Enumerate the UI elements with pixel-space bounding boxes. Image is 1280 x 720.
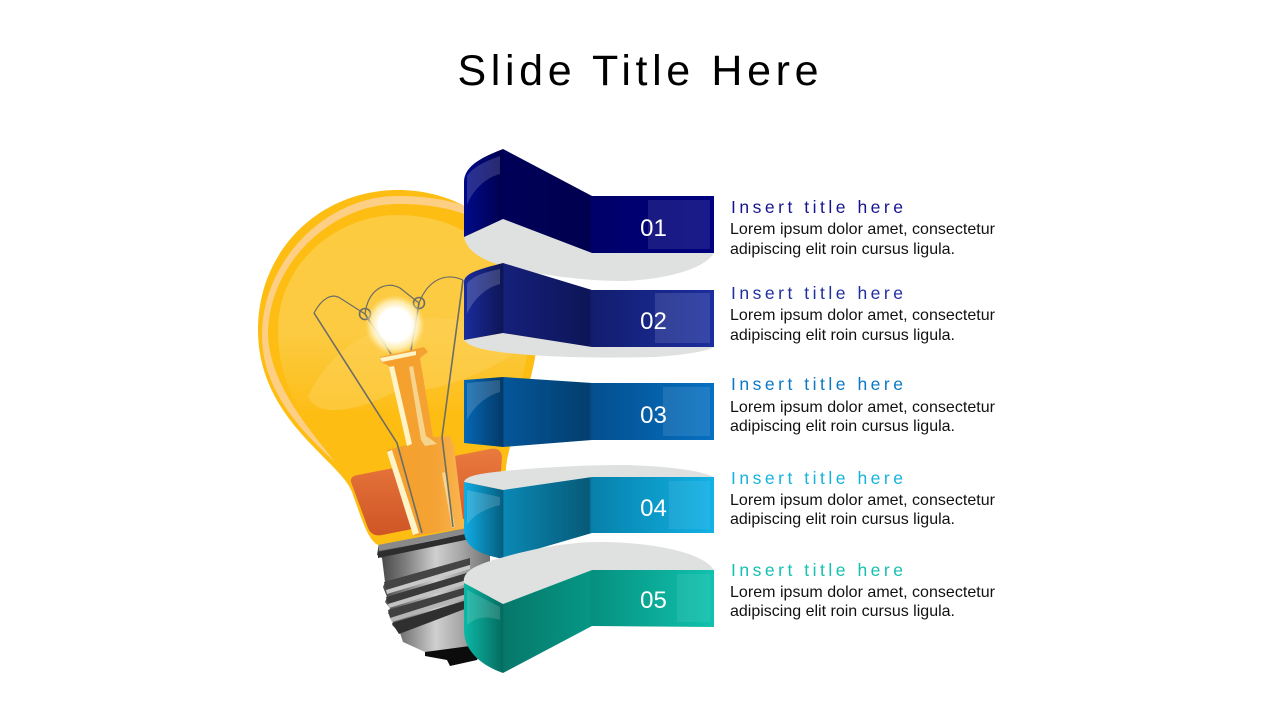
body 4: adipiscing elit roin cursus ligula. xyxy=(730,511,955,528)
heading 3: Insert title here xyxy=(731,374,903,394)
bulb screw base xyxy=(377,526,490,666)
glass swoosh xyxy=(308,318,514,410)
text block 5 xyxy=(730,560,996,620)
number 02: 02 xyxy=(640,308,667,335)
ribbon 3 xyxy=(464,377,714,447)
ribbon 5 band xyxy=(464,570,714,673)
body 2: Lorem ipsum dolor amet, consectetur xyxy=(730,307,996,324)
ribbon 5 number panel xyxy=(677,574,710,622)
heading 2: Insert title here xyxy=(731,283,903,303)
number 01: 01 xyxy=(640,215,667,242)
title: Slide Title Here xyxy=(458,47,818,95)
filament glow xyxy=(365,295,425,355)
ribbon 4 shelf xyxy=(464,465,714,490)
heading 1: Insert title here xyxy=(731,197,903,217)
ribbon 1 band xyxy=(464,149,714,253)
heading 5: Insert title here xyxy=(731,560,903,580)
icon: light bulb xyxy=(258,190,538,666)
glass rim highlight xyxy=(262,196,492,462)
body 2: adipiscing elit roin cursus ligula. xyxy=(730,327,955,344)
body 4: Lorem ipsum dolor amet, consectetur xyxy=(730,492,996,509)
text block 4 xyxy=(730,468,996,528)
body 5: Lorem ipsum dolor amet, consectetur xyxy=(730,584,996,601)
ribbon 5 xyxy=(464,542,714,673)
ribbon 2 gloss xyxy=(467,269,500,314)
text block 2 xyxy=(730,283,996,344)
ribbon 3 gloss xyxy=(467,380,500,420)
ribbon 4 band xyxy=(464,477,714,559)
ribbon 2 shelf xyxy=(464,333,714,358)
glass stem xyxy=(380,347,464,536)
ribbon 2 band xyxy=(464,263,714,347)
ribbon 1 shelf xyxy=(464,219,714,281)
number 05: 05 xyxy=(640,587,667,614)
number 03: 03 xyxy=(640,402,667,429)
ribbon 4 gloss xyxy=(467,490,500,525)
ribbon 3 band xyxy=(464,377,714,447)
body 3: Lorem ipsum dolor amet, consectetur xyxy=(730,399,996,416)
orange band xyxy=(351,449,502,535)
ribbon 4 xyxy=(464,465,714,559)
text block 3 xyxy=(730,374,996,435)
ribbon 1 gloss xyxy=(467,156,500,205)
ribbon 4 number panel xyxy=(669,481,710,529)
text block 1 xyxy=(730,197,996,258)
ribbon 5 shelf xyxy=(464,542,714,604)
number 04: 04 xyxy=(640,495,667,522)
ribbon 3 number panel xyxy=(663,387,710,436)
ribbon 2 xyxy=(464,263,714,358)
ribbon 2 number panel xyxy=(655,293,710,343)
body 3: adipiscing elit roin cursus ligula. xyxy=(730,418,955,435)
body 1: Lorem ipsum dolor amet, consectetur xyxy=(730,221,996,238)
glass inner glow xyxy=(278,215,528,410)
ribbon 5 gloss xyxy=(467,590,500,625)
ribbon 1 xyxy=(464,149,714,281)
ribbon 1 number panel xyxy=(648,200,710,249)
heading 4: Insert title here xyxy=(731,468,903,488)
lamp wires xyxy=(314,277,463,533)
body 5: adipiscing elit roin cursus ligula. xyxy=(730,603,955,620)
body 1: adipiscing elit roin cursus ligula. xyxy=(730,241,955,258)
bulb glass xyxy=(258,190,538,545)
